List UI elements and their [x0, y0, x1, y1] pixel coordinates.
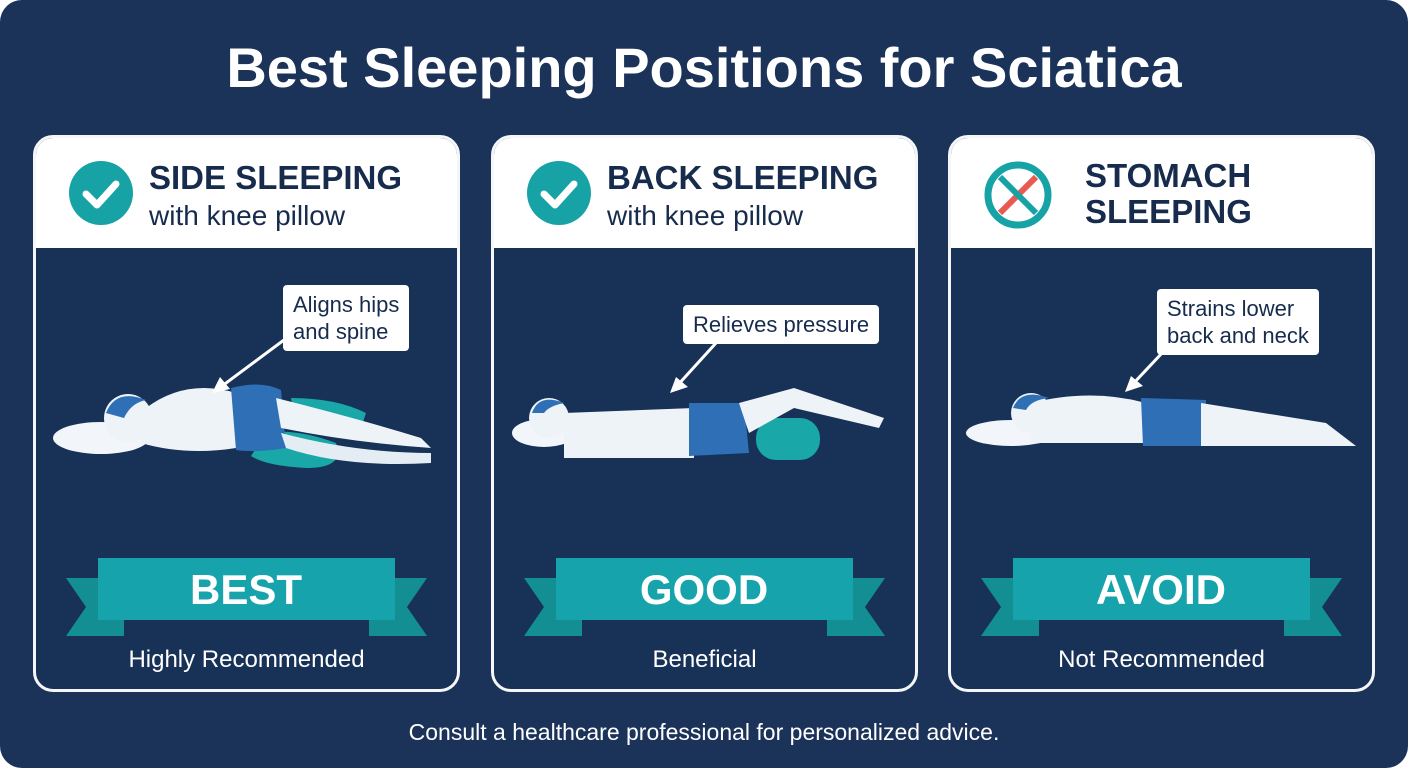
heading: STOMACH [1085, 157, 1251, 194]
heading [149, 159, 402, 231]
figure: stomach sleeper [966, 393, 1356, 446]
callout: aligns hips and spine: and spine [293, 319, 388, 344]
heading: with knee pillow [149, 200, 345, 231]
heading: with knee pillow [607, 200, 803, 231]
footer note: Consult a healthcare professional for personalized advice. [409, 719, 999, 745]
callout: strains lower back and neck: Strains lower [1167, 296, 1294, 321]
panel: back sleeping [491, 135, 918, 692]
callout: aligns hips and spine: Aligns hips [293, 292, 399, 317]
ribbon: avoid: AVOID [1096, 566, 1226, 613]
arrow [670, 344, 717, 393]
heading: SIDE SLEEPING [149, 159, 402, 196]
icon: check [527, 161, 591, 225]
heading: BACK SLEEPING [607, 159, 878, 196]
figure: side sleeper [53, 384, 431, 468]
ribbon: best: BEST [190, 566, 302, 613]
ribbon: best [66, 558, 427, 636]
title: Best Sleeping Positions for Sciatica [226, 36, 1182, 99]
arrow [212, 338, 283, 393]
icon: check [69, 161, 133, 225]
arrow [1125, 354, 1162, 392]
callout: relieves pressure [683, 305, 879, 344]
icon: prohibited [984, 162, 1052, 228]
label: beneficial: Beneficial [652, 646, 757, 673]
heading [1085, 157, 1252, 230]
panel: side sleeping [33, 135, 460, 692]
heading: SLEEPING [1085, 193, 1252, 230]
ribbon: avoid [981, 558, 1342, 636]
label: not recommended: Not Recommended [1058, 646, 1265, 673]
panel header: stomach sleeping [951, 138, 1372, 248]
ribbon: good [524, 558, 885, 636]
callout: aligns hips and spine [283, 285, 409, 351]
figure: back sleeper [512, 388, 884, 460]
panel: stomach sleeping [948, 135, 1375, 692]
callout: strains lower back and neck: back and neck [1167, 323, 1309, 348]
callout: relieves pressure: Relieves pressure [693, 312, 869, 337]
panel header: back sleeping [494, 138, 915, 248]
ribbon: good: GOOD [640, 566, 768, 613]
panel header: side sleeping [36, 138, 457, 248]
callout: strains lower back and neck [1157, 289, 1319, 355]
label: highly recommended: Highly Recommended [128, 646, 365, 673]
heading [607, 159, 878, 231]
